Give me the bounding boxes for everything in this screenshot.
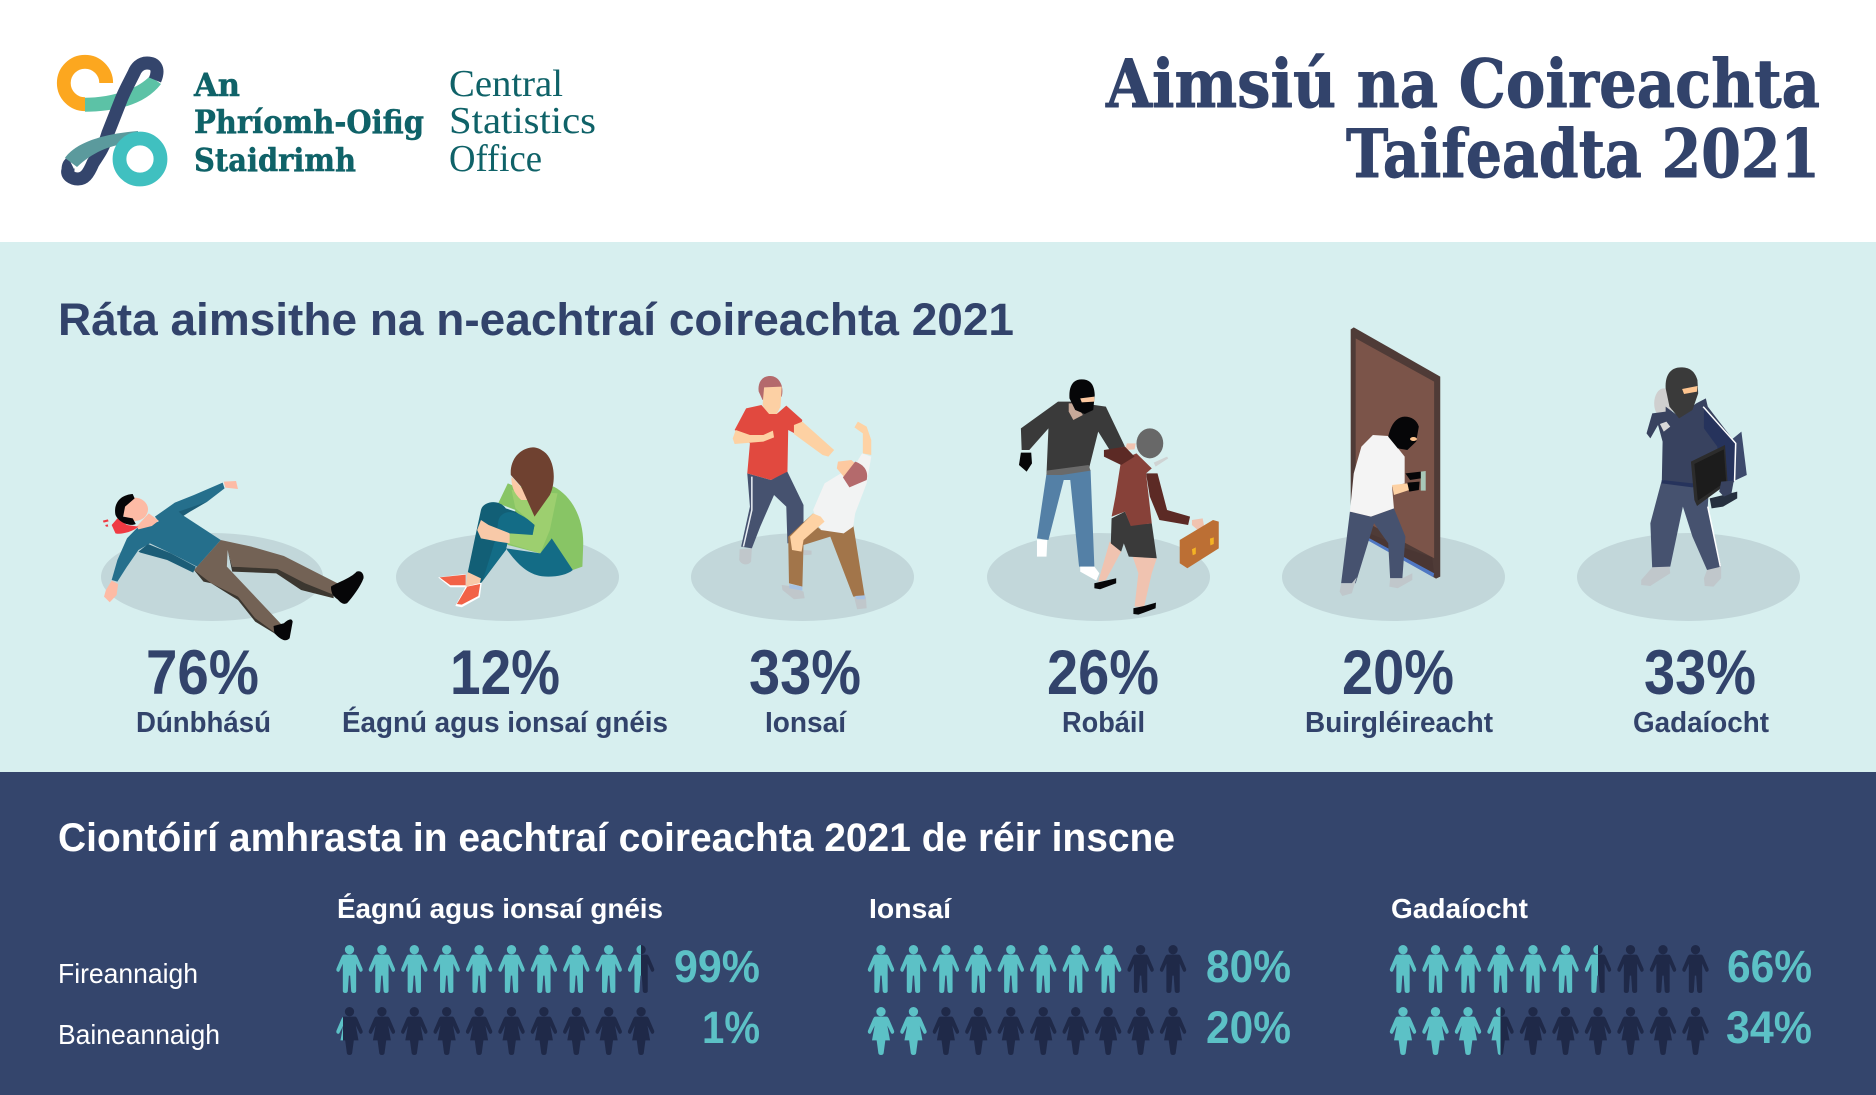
illustration: robbery of a woman with a briefcase — [1019, 379, 1219, 615]
illustration: seated woman — [438, 447, 583, 607]
chart: assault: 80% — [1206, 941, 1291, 992]
row labels — [58, 958, 220, 1050]
row labels: Baineannaigh — [58, 1019, 220, 1050]
heading: detection rate: Ráta aimsithe na n-eachtraí coireachta 2021 — [58, 294, 1014, 345]
stat: robbery: 26% — [1047, 638, 1159, 708]
stat: burglary: 20% — [1342, 638, 1454, 708]
illustration: assault, two men fighting — [733, 376, 871, 609]
chart: theft — [1390, 893, 1812, 1055]
logo text: English — [449, 63, 596, 180]
illustration: thief with stolen monitor and sack — [1641, 367, 1747, 587]
chart: assault — [868, 893, 1291, 1055]
stat: homicide — [136, 638, 271, 739]
floor ellipses — [101, 533, 1800, 621]
logo text: English: Central — [449, 63, 563, 105]
logo text: Irish: Phríomh-Oifig — [194, 103, 424, 141]
stat: robbery — [1047, 638, 1159, 739]
chart: rape and sexual assault: Éagnú agus ionsaí gnéis — [337, 893, 663, 924]
chart: theft: Gadaíocht — [1391, 893, 1528, 924]
stat: homicide: 76% — [146, 638, 259, 708]
panel: suspected offenders by gender — [0, 772, 1876, 1095]
panel: detection rates — [0, 242, 1876, 772]
stat: assault: Ionsaí — [765, 707, 847, 739]
stat: rape and sexual assault: Éagnú agus ionsaí gnéis — [342, 705, 668, 739]
logo text: Irish: An — [193, 66, 240, 104]
chart: theft: 66% — [1727, 941, 1812, 992]
chart: rape and sexual assault — [336, 893, 760, 1055]
header panel — [0, 0, 1876, 242]
illustration: homicide victim lying on the ground — [103, 481, 364, 640]
stat: burglary — [1305, 638, 1493, 739]
stat: theft — [1633, 638, 1769, 739]
logo mark — [64, 62, 161, 180]
stat: rape and sexual assault: 12% — [450, 638, 560, 708]
stat: theft: Gadaíocht — [1633, 707, 1769, 739]
row labels: Fireannaigh — [58, 958, 198, 989]
chart: assault: Ionsaí — [869, 893, 952, 924]
logo text: Irish — [193, 66, 424, 179]
logo text: Irish: Staidrimh — [194, 141, 356, 179]
stat: burglary: Buirgléireacht — [1305, 707, 1493, 739]
stat: theft: 33% — [1644, 638, 1756, 708]
stat: rape and sexual assault — [342, 638, 668, 739]
illustration: burglar at a door — [1340, 327, 1440, 596]
stat: assault — [749, 638, 861, 739]
stat: homicide: Dúnbhású — [136, 707, 271, 739]
chart: rape and sexual assault: 1% — [702, 1002, 760, 1053]
chart: theft: 34% — [1726, 1002, 1812, 1053]
logo text: English: Office — [449, 138, 542, 180]
chart: assault: 20% — [1206, 1002, 1291, 1053]
stat: robbery: Robáil — [1062, 707, 1145, 739]
chart: rape and sexual assault: 99% — [674, 941, 760, 992]
heading: offenders by gender: Ciontóirí amhrasta in eachtraí coireachta 2021 de réir inscne — [58, 816, 1175, 860]
title — [1105, 45, 1820, 193]
stat: assault: 33% — [749, 638, 861, 708]
logo text: English: Statistics — [449, 100, 596, 142]
